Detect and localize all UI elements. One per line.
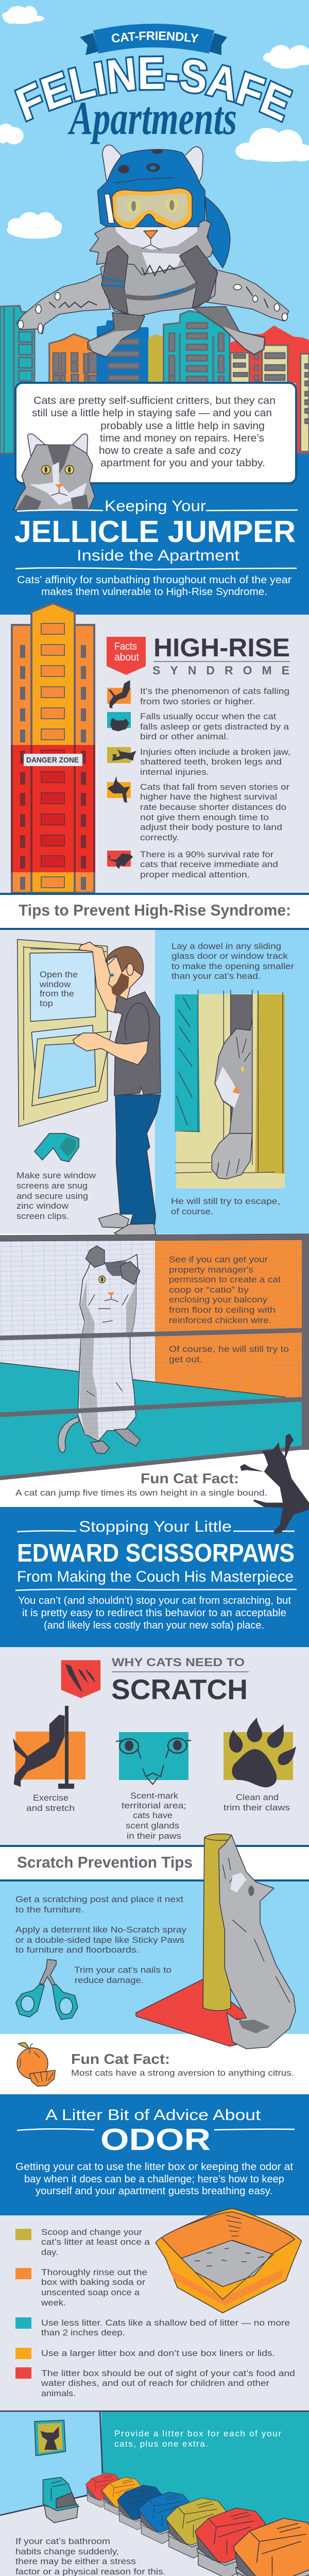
fact: seven stories: Cats that fall from seven stories or <box>140 782 289 792</box>
advice: rinse: week. <box>41 2298 66 2308</box>
illustration: cat on scratching post <box>136 1834 296 2049</box>
illustration: leaping black cat <box>240 1434 309 1534</box>
text: open the window <box>39 970 78 1008</box>
litter box: olive <box>166 2498 230 2558</box>
advice: less litter <box>41 2318 290 2337</box>
fact: survival rate: cats that receive immediate and <box>140 859 278 869</box>
heading: litter odor: ODOR <box>100 2123 211 2157</box>
fact: seven stories: rate because shorter distances do <box>140 802 286 812</box>
text: window screen clips <box>16 1171 96 1221</box>
litter box: navy <box>117 2485 164 2530</box>
text: scratching tips: to furniture and floorboards. <box>15 1945 139 1955</box>
reason: exercise and stretch: and stretch <box>26 1803 75 1813</box>
illustration: cat in helmet skydiving <box>17 145 289 357</box>
text: lay a dowel: to make the opening smaller <box>171 961 294 971</box>
fact: seven stories: not give them enough time to <box>140 812 269 822</box>
banner ribbon: Cat-Friendly: CAT-FRIENDLY <box>111 31 199 42</box>
panel: sky background <box>0 0 309 452</box>
reason: scent-mark territory: territorial area; <box>122 1801 186 1810</box>
fact list: high-rise syndrome <box>107 680 290 879</box>
text: open the window: Open the <box>40 970 78 979</box>
illustration: tabby cat portrait <box>14 434 95 510</box>
fact: falls occur: bird or other animal. <box>140 732 229 741</box>
illustration: open litter box <box>156 2209 301 2313</box>
litter box: extra teal <box>43 2477 79 2523</box>
bullet: teal <box>15 2317 31 2329</box>
heading: litter odor <box>15 2107 295 2197</box>
text: scratching tips: Apply a deterrent like No-Scratch spray <box>15 1925 187 1935</box>
text: provide a litter box: cats, plus one extra. <box>114 2439 208 2449</box>
illustration: window screen clip <box>35 1133 79 1162</box>
heading: Edward Scissorpaws <box>15 1518 297 1631</box>
fact: seven stories: adjust their body posture to land <box>140 822 282 832</box>
panel: tips heading: Tips to Prevent High-Rise Syndrome: <box>19 901 291 919</box>
reason: clean and trim claws <box>224 1717 296 1812</box>
text: lay a dowel: Lay a dowel in any sliding <box>171 941 281 951</box>
bullet: red <box>15 2367 31 2379</box>
heading: Edward Scissorpaws: You can’t (and shouldn’t) stop your cat from scratching, but <box>18 1595 291 1606</box>
icon: twisting cat on olive square <box>107 747 136 763</box>
mesh overlay <box>0 1240 302 1482</box>
text: catio tip: See if you can get your <box>169 1255 268 1264</box>
panel: intro text box: apartment for you and your tabby. <box>100 457 265 469</box>
fun cat fact: citrus: Most cats have a strong aversion to anything citrus. <box>71 2068 294 2078</box>
illustration: apartment tower with danger zone <box>12 603 94 893</box>
illustration: man opening window <box>73 942 161 1238</box>
text: scratching tips <box>15 1894 187 1985</box>
panel: blue intro band <box>0 452 309 615</box>
text: he will still try: He will still try to escape, <box>171 1196 280 1206</box>
text: open the window: from the <box>40 989 74 998</box>
panel: intro text box: probably use a little help in saving <box>100 420 265 432</box>
text: he will still try <box>171 1196 280 1216</box>
illustration: row of covered litter boxes <box>43 2473 309 2576</box>
heading: Keeping Your Jellicle Jumper: Cats' affinity for sunbathing throughout much of the year <box>17 574 291 586</box>
text: catio tip: Of course, he will still try to <box>169 1344 289 1354</box>
fact: falls occur: Falls usually occur when the cat <box>140 711 276 721</box>
fact: phenomenon: It’s the phenomenon of cats falling <box>140 686 289 696</box>
bullet: olive <box>15 2229 31 2240</box>
fact: injuries: Injuries often include a broken jaw, <box>140 747 290 757</box>
reason: scent-mark territory: in their paws <box>127 1831 181 1841</box>
reason: scent-mark territory: scent glands <box>126 1821 179 1831</box>
text: catio tip: from floor to ceiling with <box>169 1305 276 1315</box>
text: bathroom habits: habits change suddenly, <box>15 2547 119 2556</box>
advice: rinse <box>41 2267 147 2308</box>
advice: location <box>41 2368 295 2398</box>
icon: scratch marks badge <box>61 1660 100 1698</box>
heading: Why cats need to scratch: WHY CATS NEED TO <box>112 1656 245 1669</box>
badge: facts about: about <box>114 652 139 663</box>
fact: injuries: internal injuries. <box>140 767 209 777</box>
advice: rinse: unscented soap once a <box>41 2287 140 2297</box>
text: lay a dowel <box>171 941 294 981</box>
heading: Keeping Your Jellicle Jumper <box>14 498 298 598</box>
panel: high-rise facts background <box>0 615 309 893</box>
badge: facts about: Facts <box>114 641 137 652</box>
icon: landing cat on yellow square <box>107 776 131 803</box>
text: bathroom habits <box>15 2536 192 2576</box>
fact: survival rate: proper medical attention. <box>140 870 250 879</box>
illustration: apartment tower with danger zone: DANGER ZONE <box>26 756 79 765</box>
icon: tumbling cat on teal square <box>107 712 131 731</box>
text: catio tip: property manager's <box>169 1265 253 1275</box>
heading: litter odor: A Litter Bit of Advice About <box>45 2107 261 2124</box>
heading: High-Rise Syndrome: SYNDROME <box>152 664 289 677</box>
text: he will still try: of course. <box>171 1207 213 1216</box>
clouds <box>0 6 309 239</box>
reason: exercise and stretch: Exercise <box>33 1793 68 1803</box>
fun cat fact: jumping: A cat can jump five times its own height in a single bound. <box>15 1488 267 1498</box>
advice: scoop: Scoop and change your <box>41 2227 142 2237</box>
panel: dowel tip background <box>155 930 309 1234</box>
advice: rinse: Thoroughly rinse out the <box>41 2267 147 2277</box>
heading: litter odor: yourself and your apartment guests breathing easy. <box>36 2185 272 2197</box>
text: window screen clips: screens are snug <box>16 1181 88 1191</box>
fact: injuries <box>140 747 290 777</box>
illustration: cat peeking through sliding door <box>175 990 285 1189</box>
heading: Edward Scissorpaws: (and likely less costly than your new sofa) place. <box>44 1620 264 1631</box>
heading: litter odor: Getting your cat to use the litter box or keeping the odor at <box>15 2161 293 2173</box>
heading: scratch prevention tips: Scratch Prevention Tips <box>17 1853 193 1871</box>
fun cat fact: citrus: Fun Cat Fact: <box>71 2051 170 2067</box>
reason: scent-mark territory: Scent-mark <box>130 1791 179 1801</box>
panel: tips heading <box>0 893 309 930</box>
bullet: orange <box>15 2268 31 2279</box>
text: lay a dowel: than your cat’s head. <box>171 971 261 981</box>
reason: clean and trim claws: trim their claws <box>224 1803 290 1812</box>
litter box: red back <box>85 2473 122 2507</box>
advice: less litter: than 2 inches deep. <box>41 2328 125 2337</box>
litter advice list <box>15 2227 295 2398</box>
advice: location: The litter box should be out of sight of your cat’s food and <box>41 2368 295 2378</box>
text: catio tip <box>169 1255 289 1364</box>
panel: intro text box <box>15 383 296 483</box>
advice: rinse: box with baking soda or <box>41 2277 145 2287</box>
icon: falling cat on orange square <box>107 680 131 708</box>
heading: Why cats need to scratch: SCRATCH <box>111 1673 248 1705</box>
heading: litter odor: bay when it does can be a challenge; here’s how to keep <box>24 2174 284 2185</box>
text: scratching tips: Trim your cat's nails to <box>74 1965 171 1975</box>
fact: falls occur <box>140 711 289 741</box>
banner ribbon: Cat-Friendly <box>80 24 227 55</box>
fact: phenomenon: from two stories or higher. <box>140 697 255 706</box>
litter box: orange <box>234 2518 309 2576</box>
fact: phenomenon <box>140 686 289 706</box>
white fact strip <box>0 2034 309 2094</box>
reason: exercise and stretch <box>13 1706 85 1813</box>
text: catio tip: coop or “catio” by <box>169 1285 249 1295</box>
fact: seven stories <box>140 782 289 842</box>
advice: location: water dishes, and out of reach for children and other <box>41 2378 269 2388</box>
heading: High-Rise Syndrome: HIGH-RISE <box>153 633 290 662</box>
heading: Keeping Your Jellicle Jumper: JELLICLE JUMPER <box>14 515 296 549</box>
title: Feline-Safe: FELINE-SAFE <box>13 56 294 124</box>
fact: survival rate: There is a 90% survival rate for <box>140 850 273 859</box>
panel: why cats scratch background <box>0 1647 309 1845</box>
heading: Edward Scissorpaws: From Making the Couch His Masterpiece <box>17 1568 294 1585</box>
fact: seven stories: higher have the highest survival <box>140 792 277 802</box>
text: lay a dowel: glass door or window track <box>171 951 288 961</box>
text: scratching tips: Get a scratching post and place it next <box>15 1894 183 1904</box>
fact: seven stories: correctly. <box>140 833 179 842</box>
advice: larger box: Use a larger litter box and don’t use box liners or lids. <box>41 2348 275 2358</box>
text: scratching tips: to the furniture. <box>15 1905 84 1914</box>
heading: High-Rise Syndrome <box>152 633 290 677</box>
reason: scent-mark territory: cats have <box>133 1810 173 1820</box>
text: catio tip: permission to create a cat <box>169 1275 281 1284</box>
illustration: opening a window <box>18 939 111 1127</box>
panel: blue odor band <box>0 2094 309 2215</box>
icon: standing cat on red square <box>107 851 133 869</box>
advice: less litter: Use less litter. Cats like a shallow bed of litter — no more <box>41 2318 290 2328</box>
illustration: orange and slice <box>17 2043 55 2086</box>
text: bathroom habits: there may be either a stress <box>15 2556 136 2566</box>
heading: Keeping Your Jellicle Jumper: Inside the Apartment <box>77 547 240 564</box>
advice: location: animals. <box>41 2388 76 2398</box>
badge: facts about <box>107 637 146 675</box>
illustration: framed cat portrait <box>35 2420 65 2456</box>
text: window screen clips: screen clips. <box>16 1211 69 1221</box>
panel: odor list background <box>0 2215 309 2576</box>
panel: intro text box: how to create a safe and cozy <box>99 445 241 456</box>
text: scratching tips: or a double-sided tape like Sticky Paws <box>15 1935 184 1945</box>
text: open the window: top <box>40 998 53 1008</box>
text: provide a litter box: Provide a litter box for each of your <box>114 2429 281 2438</box>
illustration: nail clippers <box>16 1959 78 2020</box>
heading: scratch prevention tips <box>0 1845 309 1882</box>
litter box: blue <box>139 2492 193 2544</box>
text: window screen clips: zinc window <box>16 1201 69 1211</box>
text: window screen clips: Make sure window <box>16 1171 96 1180</box>
text: window screen clips: and secure using <box>16 1191 88 1201</box>
text: catio tip: enclosing your balcony <box>169 1295 268 1304</box>
advice: scoop: day. <box>41 2247 58 2257</box>
skyline buildings <box>0 306 309 453</box>
advice: scoop: cat’s litter at least once a <box>41 2237 150 2247</box>
title: Apartments: Apartments <box>67 92 237 144</box>
fact: falls occur: falls asleep or gets distracted by a <box>140 722 289 732</box>
text: bathroom habits: If your cat’s bathroom <box>15 2536 110 2546</box>
panel: intro text box: Cats are pretty self-sufficient critters, but they can <box>33 395 276 406</box>
advice: scoop <box>41 2227 150 2257</box>
panel: intro text box: still use a little help in staying safe — and you can <box>32 408 272 419</box>
fun cat fact: citrus <box>71 2051 294 2078</box>
fact: injuries: shattered teeth, broken legs and <box>140 757 282 767</box>
white fact strip <box>0 1450 309 1507</box>
heading: Keeping Your Jellicle Jumper: makes them vulnerable to High-Rise Syndrome. <box>41 586 267 598</box>
fact: survival rate <box>140 850 278 879</box>
text: scratching tips: reduce damage. <box>75 1975 144 1985</box>
reason: scent-mark territory <box>116 1732 191 1841</box>
panel: blue scratch band <box>0 1507 309 1647</box>
text: provide a litter box <box>114 2429 281 2449</box>
panel: scratch tips background <box>0 1882 309 2034</box>
illustration: catio enclosure <box>0 1234 309 1482</box>
panel: intro text box: time and money on repairs. Here’s <box>100 433 264 444</box>
panel: room wall <box>0 2411 309 2576</box>
heading: Edward Scissorpaws: Stopping Your Little <box>79 1518 232 1535</box>
heading: Keeping Your Jellicle Jumper: Keeping Your <box>105 498 206 515</box>
panel: window tip background <box>0 930 155 1234</box>
text: catio tip: get out. <box>169 1354 202 1364</box>
fun cat fact: jumping <box>15 1470 267 1498</box>
text: catio tip: reinforced chicken wire. <box>169 1315 271 1325</box>
litter box: yellow <box>102 2477 143 2516</box>
litter box: red front <box>195 2508 269 2576</box>
heading: Why cats need to scratch <box>111 1656 249 1705</box>
heading: Edward Scissorpaws: it is pretty easy to redirect this behavior to an acceptable <box>22 1607 286 1619</box>
text: open the window: window <box>39 979 71 989</box>
illustration: cat climbing catio mesh <box>58 1246 140 1454</box>
reason: clean and trim claws: Clean and <box>236 1792 279 1802</box>
bullet: yellow <box>15 2348 31 2359</box>
fun cat fact: jumping: Fun Cat Fact: <box>141 1470 239 1486</box>
